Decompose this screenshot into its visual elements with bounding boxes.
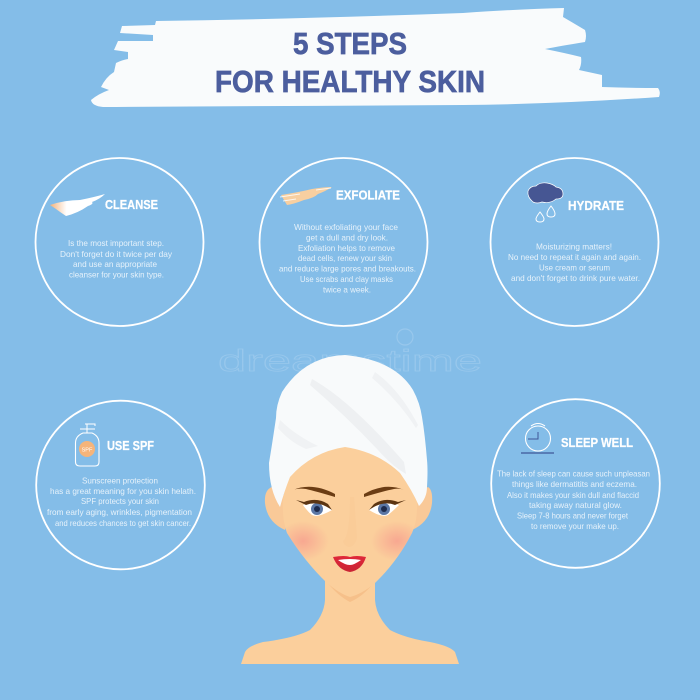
lips bbox=[333, 556, 366, 572]
title text: 5 STEPS bbox=[293, 26, 407, 61]
towel bbox=[269, 355, 428, 507]
watermark bbox=[218, 329, 482, 378]
body: sleep well: Sleep 7-8 hours and never forget bbox=[517, 512, 629, 521]
body: exfoliate: dead cells, renew your skin bbox=[298, 254, 392, 263]
body: cleanse: Don't forget do it twice per day bbox=[60, 250, 173, 259]
panel: use spf bbox=[36, 401, 205, 569]
icon: cleanser smear bbox=[50, 194, 105, 216]
panel: hydrate bbox=[490, 158, 658, 326]
body: exfoliate: Use scrabs and clay masks bbox=[300, 275, 393, 284]
blush bbox=[287, 525, 412, 556]
body: use spf: SPF protects your skin bbox=[81, 497, 159, 506]
body: use spf: and reduces chances to get skin cancer. bbox=[55, 519, 191, 528]
body: use spf: has a great meaning for you skin helath. bbox=[50, 487, 196, 496]
icon: sunscreen bottle: SPF bbox=[82, 448, 93, 454]
body: sleep well: Also it makes your skin dull and flaccid bbox=[507, 491, 639, 500]
body: use spf: Sunscreen protection bbox=[82, 477, 158, 486]
body: hydrate: Moisturizing matters! bbox=[536, 242, 612, 251]
illustration: woman with towel bbox=[241, 355, 459, 664]
panel: exfoliate bbox=[260, 158, 428, 326]
body: use spf: from early aging, wrinkles, pigmentation bbox=[47, 508, 192, 517]
heading: hydrate: HYDRATE bbox=[568, 199, 624, 213]
eyes bbox=[296, 500, 406, 516]
body: sleep well bbox=[497, 469, 650, 531]
title banner bbox=[91, 8, 660, 107]
body: sleep well: The lack of sleep can cause such unpleasan bbox=[497, 469, 650, 478]
body: cleanse: Is the most important step. bbox=[68, 239, 164, 248]
brush stroke banner bbox=[91, 8, 660, 107]
body: exfoliate: and reduce large pores and breakouts. bbox=[279, 265, 416, 274]
body: exfoliate: Exfoliation helps to remove bbox=[298, 244, 395, 253]
icon: exfoliant smear bbox=[280, 187, 332, 205]
body: cleanse: and use an appropriate bbox=[73, 260, 157, 269]
eyebrows bbox=[293, 487, 404, 497]
body: exfoliate: get a dull and dry look. bbox=[306, 233, 388, 242]
heading: cleanse: CLEANSE bbox=[105, 198, 158, 212]
panel: cleanse bbox=[36, 158, 204, 326]
face bbox=[283, 430, 417, 597]
shoulders and neck bbox=[241, 575, 459, 664]
body: exfoliate bbox=[279, 223, 416, 295]
body: exfoliate: twice a week. bbox=[323, 286, 371, 295]
body: hydrate bbox=[508, 242, 641, 283]
heading: sleep well: SLEEP WELL bbox=[561, 436, 633, 450]
body: cleanse: cleanser for your skin type. bbox=[69, 270, 164, 280]
heading: exfoliate: EXFOLIATE bbox=[336, 188, 400, 202]
body: hydrate: No need to repeat it again and again. bbox=[508, 253, 641, 262]
body: hydrate: Use cream or serum bbox=[539, 263, 610, 272]
watermark: dreamstime bbox=[218, 343, 482, 378]
panel: sleep well bbox=[491, 399, 660, 568]
neck shadow bbox=[326, 570, 375, 602]
nose bbox=[343, 497, 357, 547]
body: sleep well: taking away natural glow. bbox=[529, 501, 622, 510]
body: exfoliate: Without exfoliating your face bbox=[294, 223, 398, 232]
icon: rain cloud bbox=[528, 183, 563, 222]
body: use spf bbox=[47, 477, 196, 528]
heading: use spf: USE SPF bbox=[107, 439, 154, 453]
icon: alarm clock bbox=[521, 424, 554, 453]
body: sleep well: things like dermatitits and eczema. bbox=[512, 480, 637, 489]
body: hydrate: and don't forget to drink pure water. bbox=[511, 274, 640, 283]
ears bbox=[265, 487, 432, 530]
body: sleep well: to remove your make up. bbox=[531, 522, 619, 531]
body: cleanse bbox=[60, 239, 173, 280]
subtitle text: FOR HEALTHY SKIN bbox=[215, 64, 485, 99]
icon: sunscreen bottle bbox=[76, 424, 99, 466]
